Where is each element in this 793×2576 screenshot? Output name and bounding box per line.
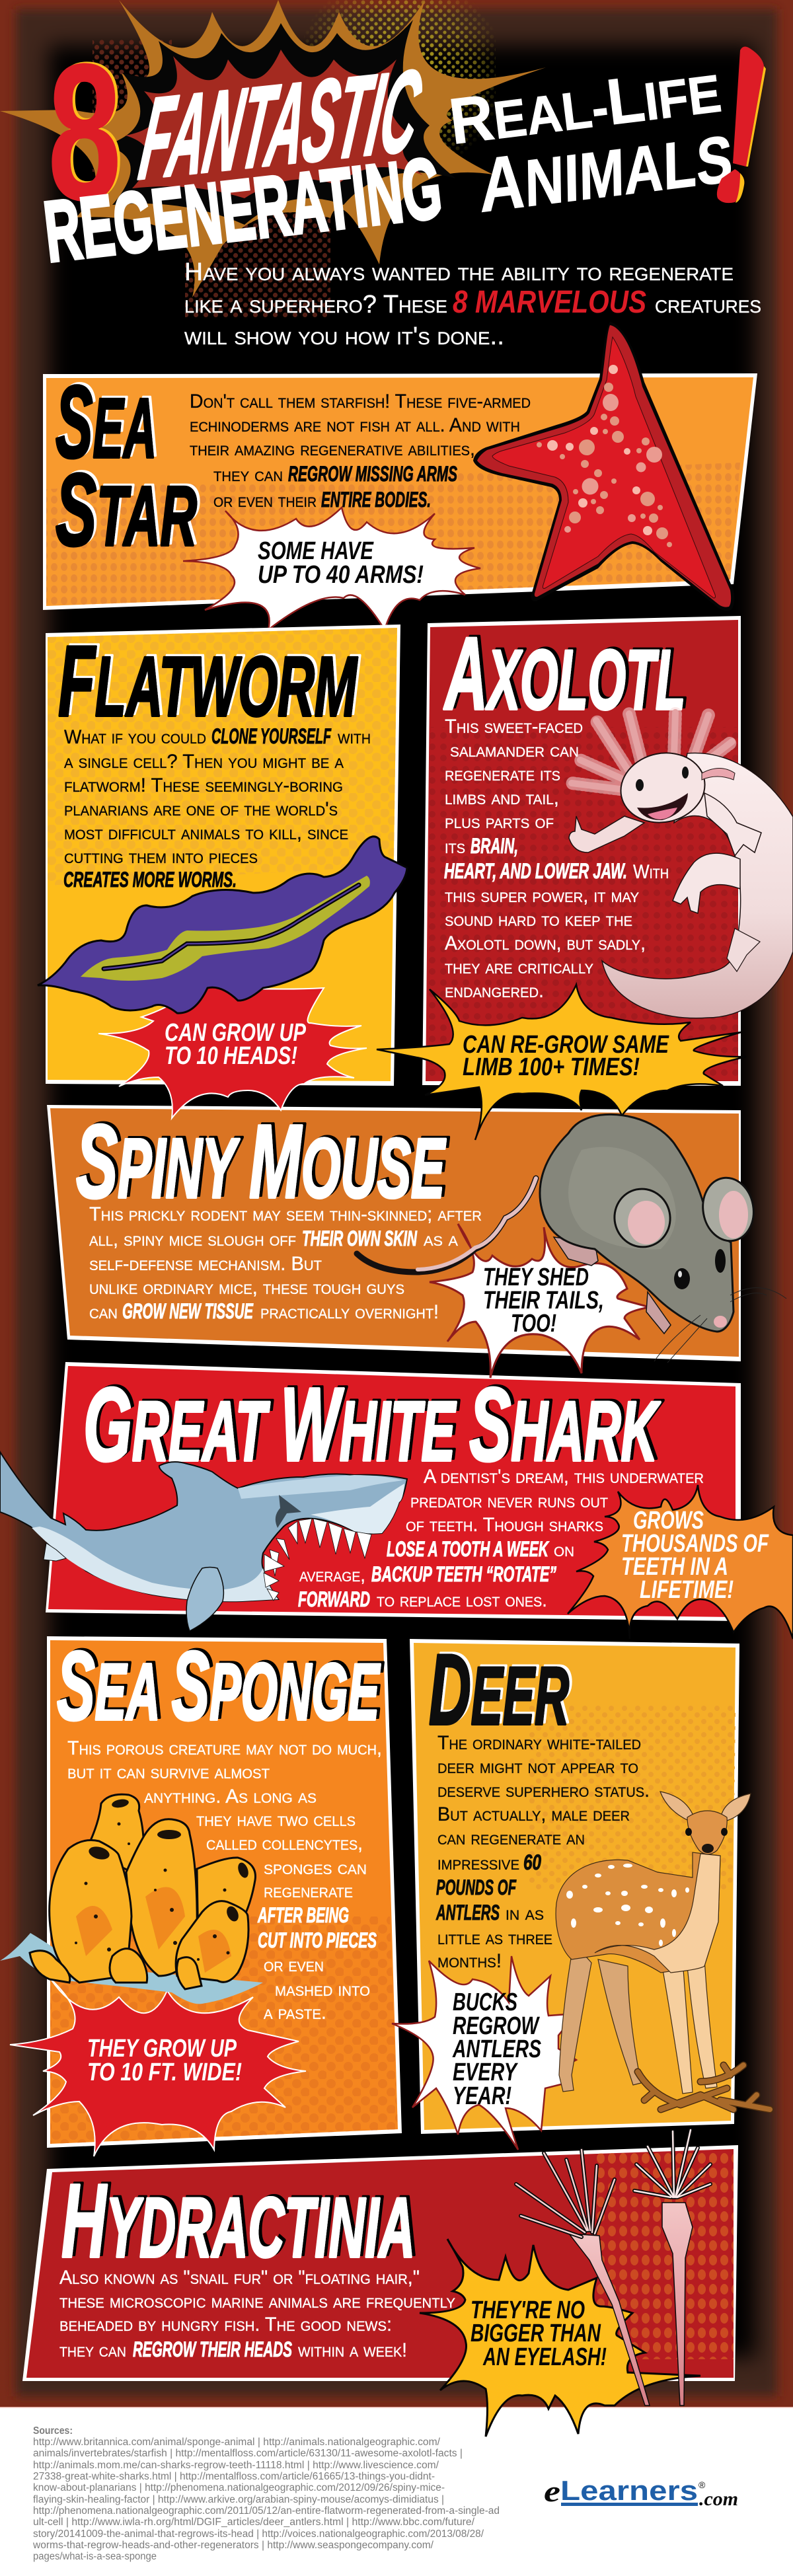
deer body (556, 1852, 720, 1973)
deer ears (660, 1792, 693, 1821)
text: shark description: BACKUP TEETH “ROTATE” (371, 1562, 556, 1586)
text: spiny mouse description: GROW NEW TISSUE (122, 1299, 254, 1323)
sources: animals/invertebrates/starfish | http://mentalfloss.com/article/63130/11-awesome-axolotl-facts | (33, 2448, 463, 2459)
icon: spiny mouse (357, 1114, 786, 1363)
heading: sea star (56, 365, 197, 568)
text: deer description: POUNDS OF (436, 1875, 517, 1899)
text: hydractinia description: beheaded by hungry fish. The good news: (59, 2314, 392, 2335)
text: axolotl description: HEART, AND LOWER JAW. (444, 859, 627, 883)
text: flatworm description: a single cell? Then you might be a (64, 751, 344, 773)
text: sea star description (190, 391, 531, 511)
text: sponge description: AFTER BEING (257, 1903, 349, 1927)
text: flatworm description: most difficult animals to kill, since (64, 822, 348, 844)
text: axolotl description: regenerate its (445, 763, 560, 785)
intro text: Have you always wanted the ability to regenerate (184, 258, 734, 286)
shark small fin (44, 1543, 66, 1561)
heading: spiny mouse: SPINY MOUSE (76, 1104, 446, 1220)
text: axolotl description: plus parts of (445, 811, 554, 833)
heading: sea sponge: SEA SPONGE (57, 1632, 381, 1741)
sources: http://www.britannica.com/animal/sponge-animal | http://animals.nationalgeographic.com/ (33, 2437, 441, 2448)
callout: some have up to 40 arms: UP TO 40 ARMS! (258, 561, 424, 589)
sources: ult-cell | http://www.iwla-rh.org/html/DGIF_articles/deer_antlers.html | http://www.bbc.com/future/ (33, 2517, 475, 2528)
text: axolotl description: endangered. (445, 980, 544, 1002)
text: deer description: deserve superhero status. (437, 1780, 650, 1801)
intro text: will show you how it's done.. (184, 322, 504, 350)
text: flatworm description: CREATES MORE WORMS. (63, 868, 237, 891)
title starburst (0, 0, 546, 317)
logo: eLearners (544, 2474, 738, 2510)
text: spiny mouse description: THEIR OWN SKIN (302, 1227, 418, 1250)
icon: hydractinia polyps (516, 2130, 710, 2406)
callout: can re-grow same limb: LIMB 100+ TIMES! (463, 1053, 640, 1081)
text: deer description: But actually, male deer (437, 1803, 630, 1825)
text: sponge description: or even (264, 1954, 324, 1976)
heading: hydractinia: HYDRACTINIA (61, 2163, 415, 2279)
callout: bucks regrow antlers: ANTLERS (452, 2035, 541, 2063)
shark pectoral fin (186, 1568, 223, 1631)
text: axolotl description: With (633, 861, 669, 883)
axolotl hind leg (673, 853, 740, 913)
callout: they shed their tails (430, 1224, 650, 1378)
axolotl far arm (704, 793, 761, 856)
callout: some have up to 40 arms (183, 508, 480, 630)
text: hydractinia description: these microscopic marine animals are frequently (59, 2291, 455, 2312)
callout: grows thousands of teeth: GROWS (633, 1507, 704, 1534)
sponge tube right (176, 1901, 248, 1982)
text: shark description: to replace lost ones. (377, 1589, 547, 1611)
intro text (184, 258, 761, 350)
text: sponge description: they have two cells (196, 1809, 356, 1831)
icon: sea sponge (0, 1794, 263, 2004)
text: deer description: months! (437, 1950, 502, 1972)
icon: flatworm (38, 837, 407, 1013)
callout: no bigger than an eyelash (420, 2239, 700, 2437)
callout: can grow up to 10 heads: CAN GROW UP (165, 1019, 307, 1047)
text: flatworm description: CLONE YOURSELF (211, 724, 332, 748)
sponge openings (87, 1798, 250, 1923)
logo: eLearners: Learners (560, 2475, 698, 2506)
text: shark description: average, (299, 1564, 365, 1586)
sources: 27338-great-white-sharks.html | http://mentalfloss.com/article/61665/13-things-you-didnt- (33, 2471, 435, 2482)
sea star spots (537, 365, 672, 547)
text: hydractinia description: they can (59, 2339, 126, 2361)
callout: bucks regrow antlers: BUCKS (453, 1989, 517, 2016)
callout: no bigger than an eyelash: BIGGER THAN (471, 2320, 601, 2347)
text: shark description: on (554, 1539, 574, 1561)
text: axolotl description: sound hard to keep the (445, 909, 632, 930)
text: sponge description: mashed into (275, 1979, 370, 2000)
mouse whiskers (654, 1288, 786, 1363)
callout: bucks regrow antlers: REGROW (453, 2012, 540, 2040)
text: sea star description: Don't call them starfish! These five-armed (190, 391, 531, 412)
sources: know-about-planarians | http://phenomena.nationalgeographic.com/2012/09/26/spiny-mice- (33, 2482, 445, 2493)
text: deer description: 60 (523, 1850, 541, 1874)
sources: story/20141009-the-animal-that-regrows-its-head | http://voices.nationalgeographic.com/2013/08/28/ (33, 2528, 484, 2540)
text: sea star description: or even their (213, 490, 317, 511)
callout: can grow up to 10 heads: TO 10 HEADS! (165, 1042, 297, 1070)
callout: they grow up to 10 ft wide (10, 1979, 306, 2156)
title: big 8: 8 (48, 22, 122, 241)
text: deer description: deer might not appear to (437, 1756, 638, 1778)
axolotl arm thumbs up (569, 816, 644, 852)
text: deer description (435, 1732, 650, 1972)
text: deer description: little as three (437, 1927, 552, 1949)
text: axolotl description: they are critically (445, 956, 593, 978)
text: sponge description: regenerate (264, 1880, 353, 1902)
panel: spiny mouse (47, 1104, 741, 1361)
text: sponge description: This porous creature may not do much, (67, 1737, 382, 1759)
callout: they shed their tails: THEIR TAILS, (483, 1287, 604, 1314)
text: deer description: can regenerate an (437, 1827, 585, 1849)
callout: bucks regrow antlers: EVERY (453, 2059, 519, 2086)
text: flatworm description (63, 724, 371, 891)
mouse ears (698, 1174, 759, 1245)
mouse eyes and nose (674, 1268, 690, 1289)
heading: sea star: SEA (56, 365, 157, 480)
text: shark description: of teeth. Though sharks (406, 1514, 603, 1536)
sources: pages/what-is-a-sea-sponge (33, 2551, 157, 2562)
deer legs (559, 1943, 591, 2092)
text: axolotl description: limbs and tail, (445, 787, 559, 809)
text: flatworm description: What if you could (64, 726, 206, 748)
heading: flatworm: FLATWORM (58, 625, 358, 738)
sponge tube left (50, 1840, 132, 1983)
text: spiny mouse description: self-defense mechanism. But (89, 1253, 322, 1275)
title: real-life: REAL-LIFE (445, 52, 724, 158)
axolotl body (602, 753, 793, 1018)
callout: can re-grow same limb (377, 985, 746, 1140)
text: hydractinia description: REGROW THEIR HEADS (133, 2337, 292, 2361)
logo: eLearners: .com (699, 2488, 738, 2510)
text: spiny mouse description: unlike ordinary mice, these tough guys (89, 1277, 404, 1299)
text: sponge description: but it can survive almost (67, 1761, 270, 1783)
panel: flatworm (46, 625, 400, 1086)
panel: hydractinia (22, 2145, 738, 2381)
callout: grows thousands of teeth: LIFETIME! (640, 1576, 734, 1604)
text: spiny mouse description: all, spiny mice slough off (89, 1229, 296, 1250)
intro text: 8 MARVELOUS (453, 285, 646, 320)
text: deer description: The ordinary white-tailed (437, 1732, 641, 1754)
sources: worms-that-regrow-heads-and-other-regenerators | http://www.seaspongecompany.com/ (32, 2540, 434, 2551)
shark eye (276, 1495, 301, 1528)
callout: some have up to 40 arms: SOME HAVE (258, 537, 374, 565)
text: flatworm description: with (338, 726, 371, 748)
text: hydractinia description (59, 2267, 455, 2361)
sources (32, 2425, 500, 2562)
text: spiny mouse description: as a (424, 1229, 458, 1250)
text: shark description: LOSE A TOOTH A WEEK (387, 1537, 550, 1561)
heading: great white shark: GREAT WHITE SHARK (83, 1367, 661, 1483)
polyp one (516, 2150, 650, 2406)
text: axolotl description: this super power, it may (445, 885, 639, 907)
text: FANTASTIC (133, 46, 428, 204)
deer spots (566, 1864, 689, 1946)
text: axolotl description: BRAIN, (471, 834, 518, 858)
text: sea star description: echinoderms are not fish at all. And with (190, 414, 520, 436)
text: shark description: FORWARD (298, 1587, 370, 1611)
sponge small tubes (30, 1951, 70, 1983)
icon: deer (556, 1792, 770, 2109)
text: sponge description: anything. As long as (144, 1786, 317, 1807)
text: deer description: impressive (437, 1852, 519, 1874)
panel: sea sponge (47, 1632, 402, 2148)
panel: sea star (43, 365, 757, 610)
text: sponge description: called collencytes, (206, 1833, 363, 1854)
title: regenerating: REGENERATING (40, 139, 446, 280)
text: hydractinia description: within a week! (298, 2339, 407, 2361)
text: flatworm description: cutting them into pieces (64, 846, 258, 868)
callout: they shed their tails: THEY SHED (483, 1264, 589, 1291)
sources: flaying-skin-healing-factor | http://www.arkive.org/arabian-spiny-mouse/acomys-dimidiatus | (33, 2494, 444, 2505)
sponge tube back (86, 1794, 144, 1877)
sources: http://phenomena.nationalgeographic.com/2011/05/12/an-entire-flatworm-regenerated-from-a-single-ad (33, 2505, 500, 2517)
callout: bucks regrow antlers: YEAR! (453, 2082, 511, 2110)
text: spiny mouse description (89, 1203, 482, 1323)
intro text: creatures (655, 291, 761, 319)
sponge tube right back (197, 1858, 255, 1950)
callout: can re-grow same limb: CAN RE-GROW SAME (463, 1031, 669, 1059)
callout: they grow up to 10 ft wide: TO 10 FT. WIDE! (87, 2059, 242, 2086)
logo: eLearners: e (544, 2474, 560, 2508)
text: sea star description: they can (213, 464, 283, 486)
text: sponge description (67, 1737, 382, 2024)
text: axolotl description: This sweet-faced (445, 716, 583, 738)
callout: they shed their tails: TOO! (511, 1310, 556, 1338)
sources: Sources: (33, 2425, 73, 2437)
text: shark description: predator never runs out (410, 1490, 608, 1512)
callout: grows thousands of teeth (568, 1485, 793, 1639)
text: flatworm description: planarians are one of the world's (64, 798, 338, 820)
callout: no bigger than an eyelash: THEY'RE NO (471, 2296, 585, 2324)
axolotl head (615, 745, 711, 830)
text: axolotl description (444, 716, 669, 1002)
intro text: like a superhero? These (184, 291, 447, 319)
text: shark description: A dentist's dream, this underwater (424, 1466, 704, 1488)
text: sea star description: their amazing regenerative abilities, (190, 438, 475, 460)
callout: bucks regrow antlers (392, 1956, 576, 2150)
heading: deer: DEER (429, 1634, 569, 1746)
title: animals: ANIMALS (479, 113, 734, 229)
shark teeth (264, 1519, 371, 1601)
callout: grows thousands of teeth: TEETH IN A (621, 1553, 728, 1581)
text: shark description (298, 1466, 704, 1611)
text: axolotl description: salamander can (450, 739, 579, 761)
title: exclamation mark (717, 46, 766, 203)
sponge tube center (126, 1819, 197, 1976)
text: axolotl description: Axolotl down, but sadly, (445, 932, 646, 954)
mouse body (540, 1114, 734, 1332)
icon: axolotl (569, 712, 793, 1018)
icon: sea star (473, 322, 734, 611)
text: sea star description: REGROW MISSING ARMS (288, 462, 457, 486)
icon: shark (0, 1452, 407, 1631)
sources: http://animals.mom.me/can-sharks-regrow-teeth-11118.html | http://www.livescience.com/ (33, 2460, 439, 2471)
text: spiny mouse description: This prickly rodent may seem thin-skinned; after (89, 1203, 482, 1225)
text: spiny mouse description: can (89, 1301, 118, 1323)
callout: can grow up to 10 heads (98, 985, 367, 1118)
text: deer description: ANTLERS (435, 1901, 500, 1924)
text: sponge description: sponges can (264, 1857, 367, 1879)
deer head (687, 1811, 727, 1854)
panel: deer (410, 1634, 739, 2134)
text: axolotl description: its (445, 836, 465, 858)
text: sponge description: a paste. (264, 2002, 326, 2024)
text: flatworm description: flatworm! These seemingly-boring (64, 775, 343, 796)
panel: great white shark (46, 1362, 741, 1621)
text: deer description: in as (506, 1903, 544, 1924)
heading: sea star: STAR (56, 453, 197, 568)
sponge pores (75, 1823, 230, 1961)
deer shed antlers (638, 2065, 770, 2109)
text: spiny mouse description: practically overnight! (260, 1301, 439, 1323)
mouse feet (554, 1237, 598, 1266)
mouse tail (357, 1178, 536, 1272)
callout: they grow up to 10 ft wide: THEY GROW UP (87, 2035, 237, 2063)
panel: axolotl (422, 616, 741, 1086)
text: sponge description: CUT INTO PIECES (258, 1928, 377, 1952)
callout: no bigger than an eyelash: AN EYELASH! (482, 2343, 607, 2371)
text: sea star description: ENTIRE BODIES. (321, 488, 431, 511)
text: hydractinia description: Also known as "snail fur" or "floating hair," (59, 2267, 420, 2289)
axolotl gills (572, 712, 732, 790)
polyp two (634, 2130, 710, 2406)
logo: eLearners: ® (699, 2480, 706, 2490)
